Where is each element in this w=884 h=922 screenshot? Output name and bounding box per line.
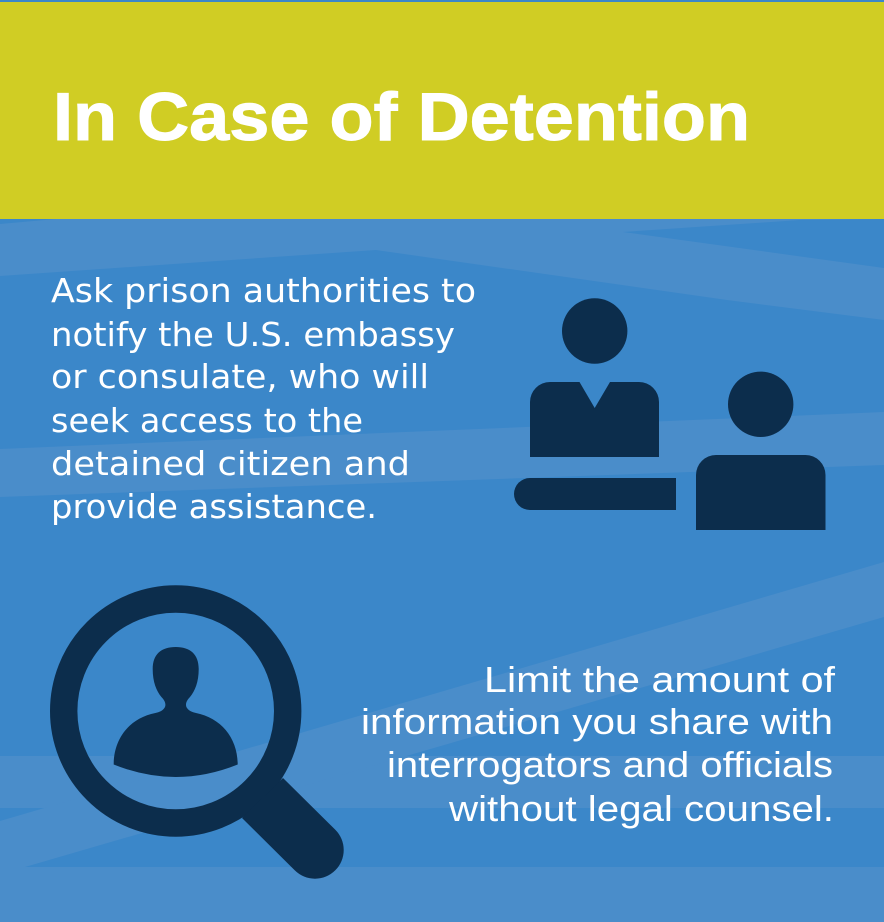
detainee body — [696, 455, 826, 530]
text block: notify embassy: notify the U.S. embassy — [51, 315, 455, 354]
text block: limit information: information you share with — [361, 701, 833, 742]
text block: notify embassy: seek access to the — [51, 401, 363, 440]
text block: notify embassy: provide assistance. — [51, 487, 377, 526]
magnifier handle — [242, 778, 344, 879]
title: In Case of Detention — [53, 79, 750, 155]
text block: limit information: without legal counsel. — [448, 788, 834, 829]
text block: notify embassy — [51, 271, 476, 526]
detainee head — [728, 372, 793, 437]
text block: notify embassy: Ask prison authorities to — [51, 271, 476, 310]
text block: limit information: interrogators and officials — [387, 744, 833, 785]
person silhouette — [114, 647, 238, 777]
text block: notify embassy: detained citizen and — [51, 444, 410, 483]
text block: limit information: Limit the amount of — [484, 659, 836, 700]
magnifier lens ring — [64, 599, 288, 823]
official body — [530, 382, 659, 457]
text block: notify embassy: or consulate, who will — [51, 357, 429, 396]
icon: magnifying glass over person — [64, 599, 344, 879]
header band — [0, 2, 884, 219]
icon: official and detainee at a desk — [514, 298, 826, 530]
desk — [514, 478, 676, 510]
official head — [562, 298, 627, 364]
text block: limit information — [361, 659, 836, 829]
